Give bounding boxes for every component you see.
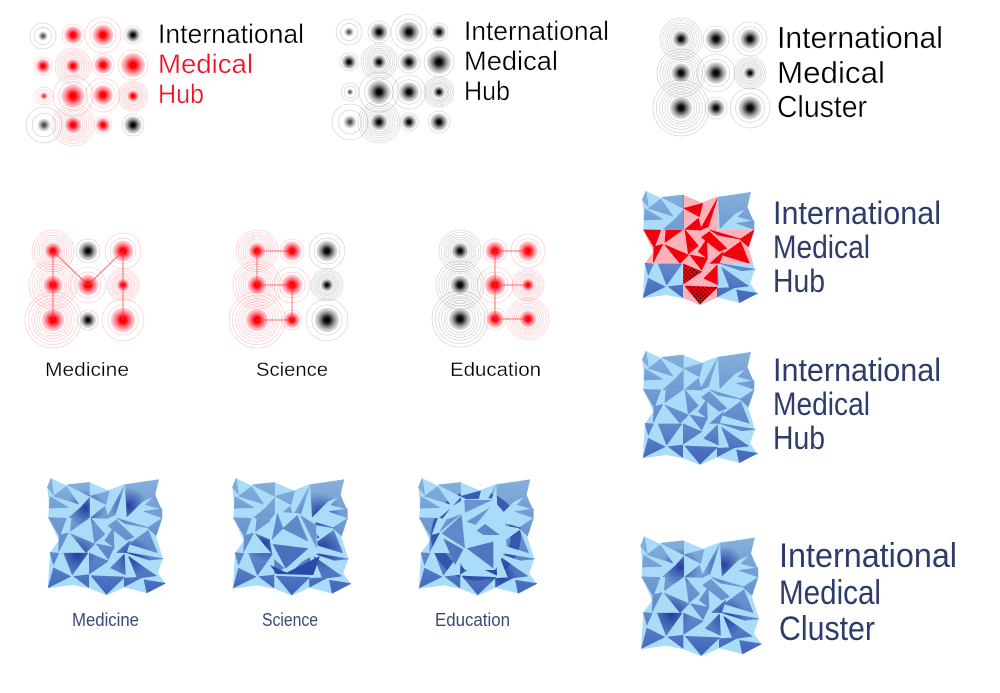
- panel: Education circle network: [432, 230, 549, 381]
- wordmark: International Medical Hub in black: Medical: [464, 46, 558, 76]
- icon: grey concentric circle grid: [332, 14, 454, 143]
- logo: greyscale International Medical Cluster: [653, 18, 943, 136]
- icon: Medicine circles with connecting lines: [25, 230, 144, 348]
- logo: greyscale International Medical Hub: [332, 14, 609, 143]
- panel: Medicine circle network: [25, 230, 144, 381]
- wordmark: International Medical Cluster: [777, 20, 943, 124]
- logo: red and blue polygon International Medical Hub: [642, 191, 941, 305]
- wordmark: International Medical Hub navy: Hub: [773, 263, 825, 299]
- icon: shaded blue triangle mesh: [641, 537, 761, 656]
- wordmark: International Medical Cluster navy: [779, 537, 957, 648]
- icon: red and grey concentric circle grid: [26, 17, 148, 146]
- panel: Education polygon: [418, 478, 537, 630]
- label: Science navy: Science: [262, 610, 318, 630]
- logo: blue polygon International Medical Hub: [642, 351, 941, 465]
- icon: Science triangle mesh with raised centre: [232, 478, 351, 596]
- panel: Science polygon: [232, 478, 351, 630]
- wordmark: International Medical Cluster navy: Medical: [779, 574, 881, 612]
- wordmark: International Medical Hub navy: International: [773, 195, 941, 231]
- icon: Medicine blue triangle mesh: [47, 478, 165, 595]
- wordmark: International Medical Hub in black: [464, 16, 609, 106]
- label: Medicine navy: Medicine: [72, 610, 139, 630]
- wordmark: International Medical Hub in black: International: [464, 16, 609, 46]
- wordmark: International Medical Hub in black and red: Medical: [158, 49, 253, 79]
- wordmark: International Medical Hub in black: Hub: [464, 76, 510, 106]
- label: Science: Science: [256, 360, 328, 381]
- wordmark: International Medical Hub in black and red: International: [158, 19, 304, 49]
- logo: blue polygon International Medical Cluster: [641, 537, 957, 656]
- wordmark: International Medical Hub navy second: International: [773, 352, 941, 388]
- wordmark: International Medical Hub navy second: [773, 352, 941, 456]
- panel: Medicine polygon: [47, 478, 165, 630]
- wordmark: International Medical Cluster: International: [777, 20, 943, 55]
- icon: Education circles with connecting lines: [432, 230, 549, 347]
- wordmark: International Medical Hub in black and red: [158, 19, 304, 109]
- logo: red International Medical Hub: [26, 17, 304, 146]
- panel: Science circle network: [229, 230, 348, 381]
- wordmark: International Medical Hub navy: Medical: [773, 229, 870, 265]
- label: Education navy: Education: [435, 610, 510, 630]
- wordmark: International Medical Cluster: Cluster: [777, 89, 867, 124]
- icon: Education triangle mesh with round centre: [418, 478, 537, 596]
- wordmark: International Medical Hub navy second: Hub: [773, 420, 825, 456]
- wordmark: International Medical Cluster navy: International: [779, 537, 957, 575]
- wordmark: International Medical Hub in black and red: Hub: [158, 79, 204, 109]
- wordmark: International Medical Cluster: Medical: [777, 55, 885, 90]
- wordmark: International Medical Hub navy: [773, 195, 941, 299]
- wordmark: International Medical Cluster navy: Cluster: [779, 610, 875, 648]
- icon: grey nine circle grid: [653, 18, 770, 136]
- label: Medicine: Medicine: [45, 360, 129, 381]
- wordmark: International Medical Hub navy second: Medical: [773, 386, 870, 422]
- icon: Science circles with connecting lines: [229, 230, 348, 348]
- icon: blue triangle mesh: [642, 351, 757, 465]
- icon: triangle mesh with red cross: [642, 191, 757, 305]
- label: Education: Education: [450, 360, 541, 381]
